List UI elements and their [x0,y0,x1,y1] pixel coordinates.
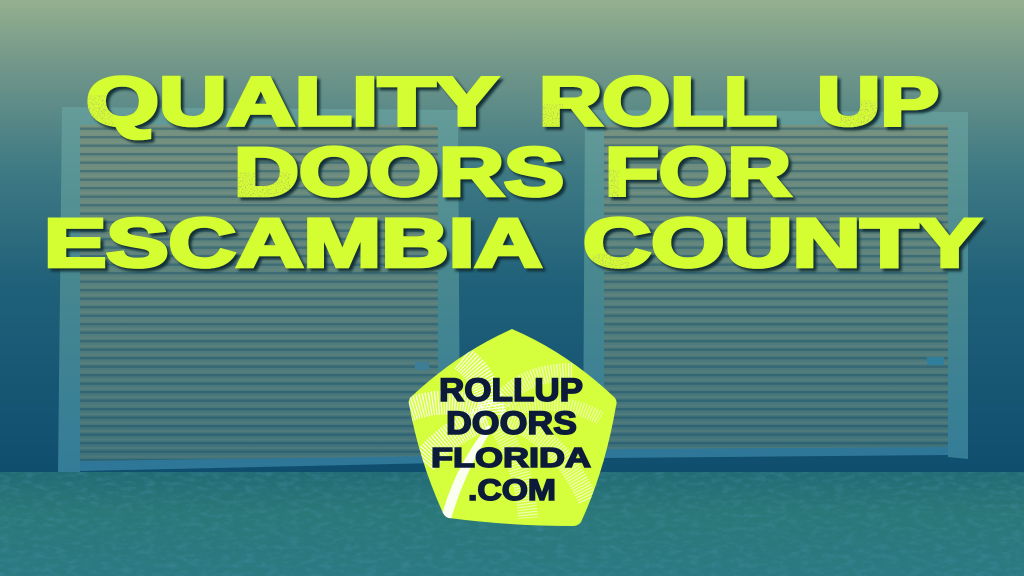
badge text: ROLLUP [439,372,583,408]
title line 3 [44,204,981,282]
door latch [415,362,429,370]
title line 3: COUNTY [583,204,981,282]
title line 2: FOR [605,134,791,210]
badge shape [409,329,617,526]
badge text: DOORS [446,405,577,441]
badge text: FLORIDA [431,442,591,473]
title [44,63,981,282]
door shutter [604,125,948,449]
title line 2: DOORS [234,134,564,210]
title line 1: QUALITY [86,63,498,140]
door frame [583,110,968,462]
right roll-up door [583,110,968,462]
logo badge [408,329,617,526]
title line 3: ESCAMBIA [44,204,542,282]
ground: grass [0,472,1024,576]
door threshold [604,447,948,458]
door latch [927,357,944,365]
title line 1 [86,63,939,140]
door threshold [80,456,438,471]
title line 1: UP [817,63,939,140]
title line 1: ROLL [539,63,777,140]
title line 2 [234,134,791,210]
door frame [58,107,460,474]
badge text [431,372,591,507]
badge text: .COM [468,474,556,507]
left roll-up door [58,107,460,474]
icon: palm tree [408,358,600,526]
door shutter [80,125,438,461]
